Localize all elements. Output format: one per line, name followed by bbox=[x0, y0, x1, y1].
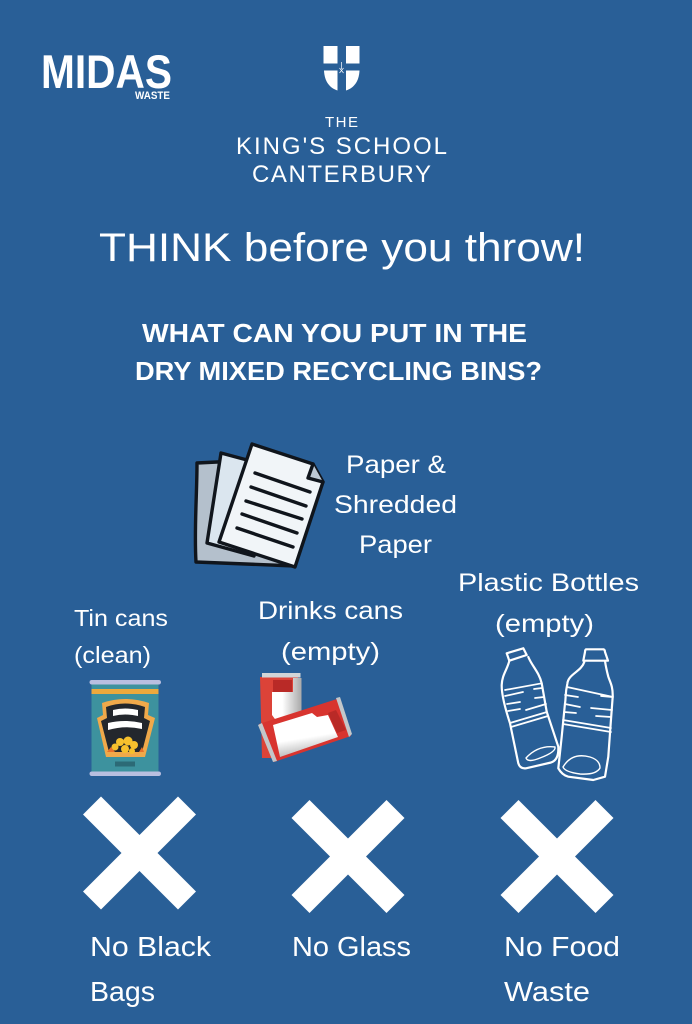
label: no black bags: Bags bbox=[90, 976, 155, 1007]
icon: cross, no black bags bbox=[83, 796, 196, 910]
label: no black bags: No Black bbox=[90, 931, 212, 962]
subtitle bbox=[135, 318, 542, 386]
label: drinks cans bbox=[258, 597, 403, 666]
icon: cross, no glass bbox=[292, 800, 404, 913]
label: drinks cans: Drinks cans bbox=[258, 597, 403, 625]
label: no food waste bbox=[504, 931, 620, 1007]
label: plastic bottles bbox=[458, 569, 639, 638]
logo text: The King's School Canterbury: KING'S SCHOOL bbox=[236, 133, 447, 160]
label: paper: Shredded bbox=[334, 491, 457, 519]
label: paper: Paper & bbox=[346, 451, 446, 479]
logo: Midas Waste: WASTE bbox=[135, 90, 170, 102]
icon: tin can bbox=[90, 680, 161, 776]
label: paper bbox=[334, 451, 457, 559]
logo: Midas Waste: MIDAS bbox=[41, 45, 172, 98]
label: no glass: No Glass bbox=[292, 931, 411, 962]
label: plastic bottles: Plastic Bottles bbox=[458, 569, 639, 597]
label: no food waste: No Food bbox=[504, 931, 620, 962]
icon: paper stack bbox=[195, 444, 323, 567]
logo text: The King's School Canterbury bbox=[236, 114, 447, 188]
icon: school shield bbox=[324, 46, 360, 90]
label: plastic bottles: (empty) bbox=[495, 610, 594, 638]
icon: drinks cans bbox=[258, 673, 352, 762]
label: no black bags bbox=[90, 931, 212, 1007]
right bottle bbox=[558, 649, 613, 780]
logo text: The King's School Canterbury: THE bbox=[325, 114, 358, 131]
label: tin cans bbox=[74, 605, 168, 668]
subtitle: DRY MIXED RECYCLING BINS? bbox=[135, 356, 542, 386]
left bottle bbox=[502, 648, 558, 768]
label: tin cans: (clean) bbox=[74, 642, 151, 668]
title: THINK before you throw! bbox=[99, 226, 585, 270]
icon: plastic bottles bbox=[502, 648, 613, 780]
label: paper: Paper bbox=[359, 531, 432, 559]
logo text: The King's School Canterbury: CANTERBURY bbox=[252, 161, 431, 188]
label: drinks cans: (empty) bbox=[281, 638, 380, 666]
label: no food waste: Waste bbox=[504, 976, 590, 1007]
label: tin cans: Tin cans bbox=[74, 605, 168, 631]
subtitle: WHAT CAN YOU PUT IN THE bbox=[142, 318, 527, 348]
icon: cross, no food waste bbox=[500, 800, 614, 913]
